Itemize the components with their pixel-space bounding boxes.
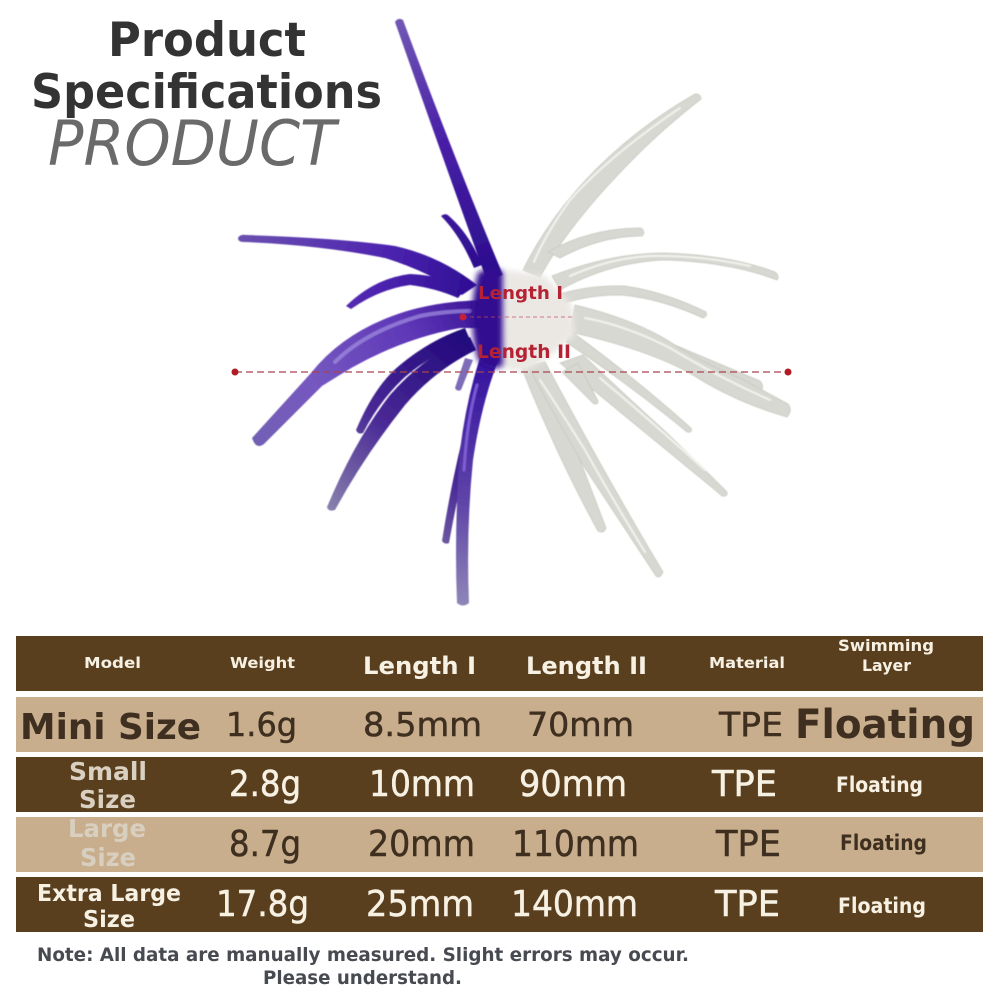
row: Extra Large Size: Extra Large [37, 881, 181, 907]
heading: Specifications: Specifications [31, 65, 382, 120]
footnote: Note: All data are manually measured. Slight errors may occur. [37, 944, 689, 966]
row: Small Size [16, 757, 983, 814]
header row: Layer [862, 656, 911, 675]
length II guide [232, 368, 792, 376]
row: Extra Large Size: TPE [714, 884, 780, 925]
row: Mini Size: 8.5mm [363, 705, 482, 744]
header row: Length I [363, 652, 476, 680]
row: Mini Size [16, 697, 983, 752]
row: Small Size: Small [69, 757, 147, 786]
label: Length II: Length II [477, 341, 571, 363]
header row: Material [709, 654, 785, 672]
footnote: Please understand. [263, 967, 462, 989]
label: Length I: Length I [478, 283, 563, 304]
heading: Product: Product [108, 13, 306, 68]
row: Mini Size: Mini Size [20, 707, 201, 748]
title block [31, 13, 382, 180]
row: Extra Large Size: 17.8g [216, 884, 309, 925]
row: Extra Large Size: Floating [838, 894, 926, 918]
white tentacle highlights [534, 108, 770, 552]
header row: Weight [230, 654, 295, 672]
row: Large Size: Large [68, 814, 146, 843]
lure head: purple half [472, 269, 503, 368]
row: Large Size: 20mm [368, 824, 475, 865]
row: Small Size: 90mm [519, 764, 627, 805]
row: Large Size: Size [80, 843, 136, 872]
row: Extra Large Size: Size [83, 907, 135, 933]
specification table [16, 636, 983, 933]
subheading: PRODUCT: PRODUCT [48, 107, 340, 180]
footnote [37, 944, 689, 989]
length I guide [460, 314, 572, 320]
product photo: two-colour soft lure [238, 19, 790, 606]
row: Mini Size: Floating [795, 702, 975, 748]
purple tentacle highlights [335, 311, 477, 470]
row: Small Size: 2.8g [229, 764, 301, 805]
row: Mini Size: 70mm [527, 705, 634, 744]
row: Extra Large Size: 140mm [511, 884, 638, 925]
row: Large Size: 8.7g [229, 824, 301, 865]
row: Extra Large Size: 25mm [366, 884, 474, 925]
row: Large Size: 110mm [512, 824, 639, 865]
white tentacles [522, 94, 790, 577]
row: Small Size: Size [79, 785, 136, 814]
header row: Length II [526, 652, 647, 680]
dimension markers [232, 283, 792, 376]
header row [16, 636, 983, 691]
purple tentacles [238, 19, 503, 606]
row: Small Size: 10mm [369, 764, 475, 805]
row: Mini Size: 1.6g [226, 705, 297, 744]
row: Large Size: Floating [840, 831, 927, 855]
row: Extra Large Size [16, 877, 983, 933]
row: Large Size [16, 814, 983, 872]
lure head: white half [503, 270, 575, 372]
row: Small Size: TPE [711, 764, 777, 805]
row: Large Size: TPE [715, 824, 781, 865]
row: Small Size: Floating [836, 773, 923, 797]
header row: Swimming [838, 636, 934, 655]
header row: Model [84, 654, 141, 672]
row: Mini Size: TPE [718, 705, 783, 744]
